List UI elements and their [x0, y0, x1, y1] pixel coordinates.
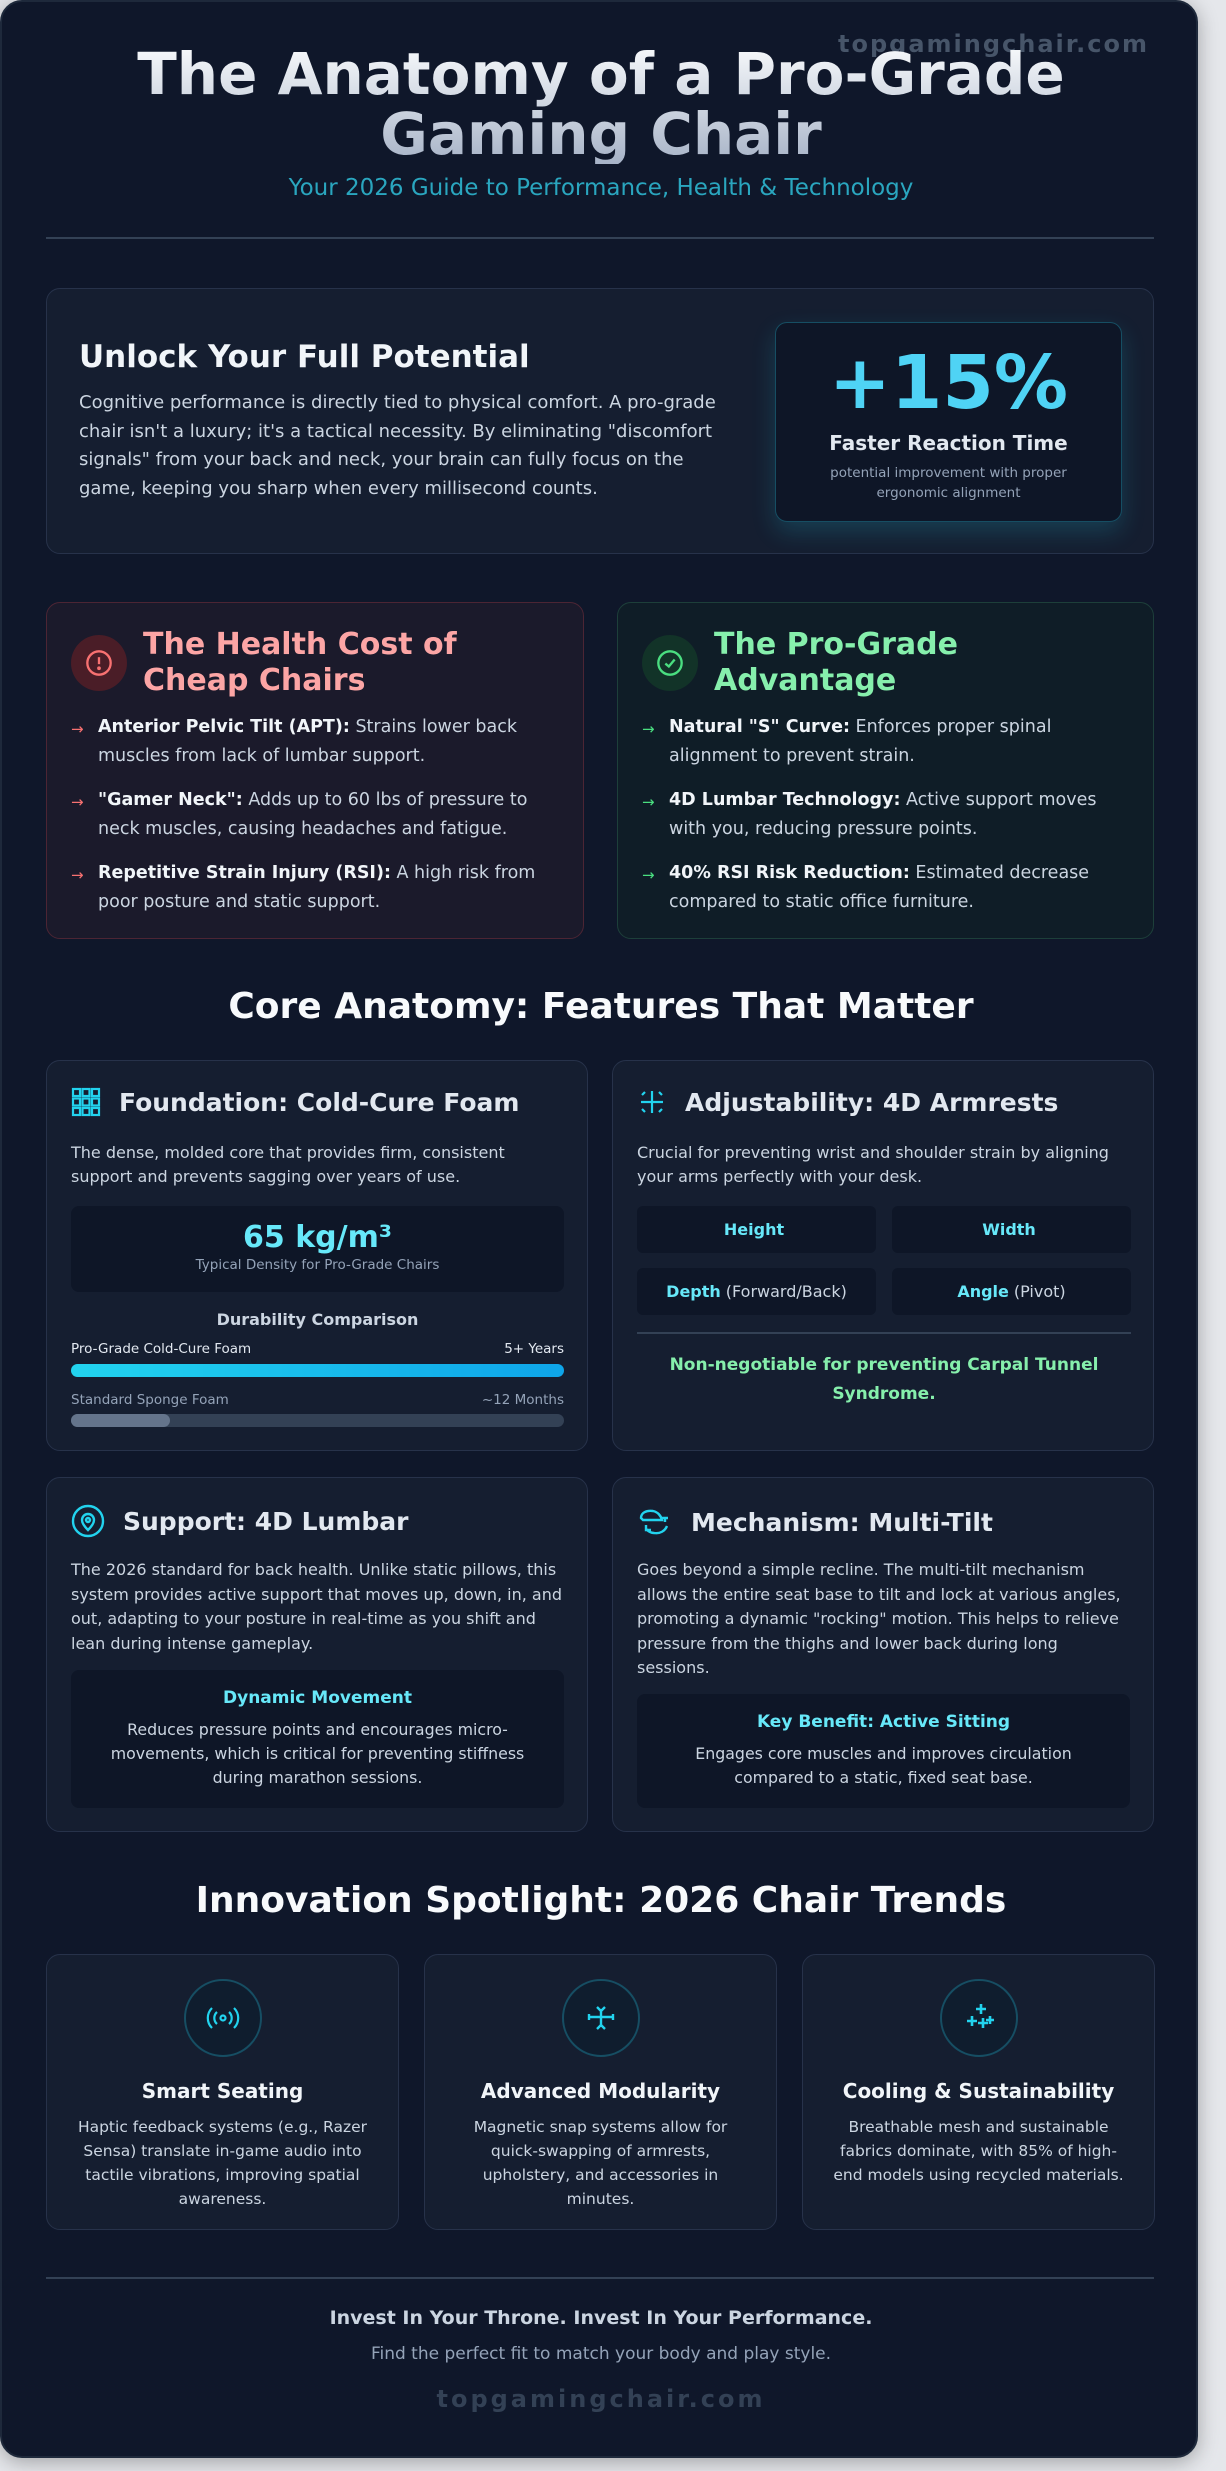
heading [143, 627, 457, 698]
trend card: modularity: Magnetic snap systems allow for quick-swapping of armrests, upholstery, and accessories in minutes. [474, 2118, 727, 2208]
adjustment grid: Width [982, 1220, 1036, 1239]
durability chart: 5+ Years [504, 1341, 564, 1357]
description: The 2026 standard for back health. Unlike static pillows, this system provides active support that moves up, down, in, and out, adapting to your posture in real-time as you shift and lean during intense gameplay. [71, 1560, 562, 1652]
trend card: smart seating: Haptic feedback systems (e.g., Razer Sensa) translate in-game audio into tactile vibrations, improving spatial awareness. [78, 2118, 367, 2208]
heading: Mechanism: Multi-Tilt [691, 1508, 993, 1536]
trend card: cooling: Cooling & Sustainability [843, 2079, 1114, 2103]
panel: foundation [46, 1060, 588, 1451]
trend card: smart seating: Smart Seating [142, 2079, 303, 2103]
panel: pro-grade advantage [617, 602, 1154, 939]
footer tagline: Invest In Your Throne. Invest In Your Performance. [330, 2307, 872, 2329]
heading: Advantage [714, 663, 896, 698]
description: Goes beyond a simple recline. The multi-tilt mechanism allows the entire seat base to tilt and lock at various angles, promoting a dynamic "rocking" motion. This helps to relieve pressure from the thighs and lower back during long sessions. [637, 1560, 1121, 1677]
list [71, 717, 535, 912]
description: Crucial for preventing wrist and shoulder strain by aligning your arms perfectly with your desk. [637, 1143, 1109, 1186]
durability chart: Pro-Grade Cold-Cure Foam [71, 1341, 251, 1357]
list: "Gamer Neck": Adds up to 60 lbs of pressure to neck muscles, causing headaches and fatigue. [98, 790, 527, 839]
stat number: +15% [829, 340, 1068, 426]
adjustment grid [637, 1206, 1131, 1315]
density box [71, 1206, 564, 1292]
intro heading: Unlock Your Full Potential [79, 339, 530, 375]
list: → [642, 793, 655, 811]
section heading: core anatomy: Core Anatomy: Features That Matter [228, 986, 974, 1027]
description: The dense, molded core that provides firm, consistent support and prevents sagging over years of use. [71, 1143, 505, 1186]
sub box: Engages core muscles and improves circulation compared to a static, fixed seat base. [695, 1744, 1072, 1787]
heading: Cheap Chairs [143, 663, 365, 698]
icon: warning [71, 635, 127, 691]
trend card: smart seating [46, 1954, 399, 2230]
density box: 65 kg/m³ [243, 1220, 392, 1255]
title: The Anatomy of a Pro-Grade [137, 40, 1065, 108]
trend card: modularity [424, 1954, 777, 2230]
heading [714, 627, 958, 698]
sub box [637, 1694, 1130, 1808]
durability chart: Standard Sponge Foam [71, 1392, 229, 1408]
heading: Foundation: Cold-Cure Foam [119, 1088, 519, 1116]
adjustment grid: Angle [957, 1282, 1009, 1301]
heading: The Health Cost of [143, 627, 457, 662]
sub box: Dynamic Movement [223, 1688, 412, 1708]
panel: multi-tilt [612, 1477, 1154, 1832]
list: Natural "S" Curve: Enforces proper spinal alignment to prevent strain. [669, 717, 1051, 766]
panel: intro [46, 288, 1154, 554]
list: Anterior Pelvic Tilt (APT): Strains lower back muscles from lack of lumbar support. [98, 717, 517, 766]
footer watermark: topgamingchair.com [436, 2385, 766, 2413]
trend card: cooling [802, 1954, 1155, 2230]
list: 4D Lumbar Technology: Active support moves with you, reducing pressure points. [669, 790, 1096, 839]
adjustment grid: Depth [666, 1282, 721, 1301]
watermark top: topgamingchair.com [838, 30, 1149, 58]
list: → [71, 866, 84, 884]
callout: Non-negotiable for preventing Carpal Tunnel Syndrome. [670, 1355, 1098, 1404]
heading: Support: 4D Lumbar [123, 1506, 408, 1536]
section heading: innovation: Innovation Spotlight: 2026 Chair Trends [196, 1880, 1006, 1921]
sub box [71, 1670, 564, 1808]
heading: Adjustability: 4D Armrests [685, 1088, 1058, 1116]
adjustment grid: (Pivot) [1014, 1282, 1066, 1301]
footer subtext: Find the perfect fit to match your body and play style. [371, 2344, 831, 2364]
list: → [642, 866, 655, 884]
title [2, 44, 1200, 164]
title: Gaming Chair [380, 100, 822, 168]
list: → [71, 720, 84, 738]
adjustment grid: Height [724, 1220, 784, 1239]
sub box: Reduces pressure points and encourages micro-movements, which is critical for preventing stiffness during marathon sessions. [111, 1720, 524, 1787]
stat label: Faster Reaction Time [829, 431, 1068, 455]
icon: vibration [184, 1979, 262, 2057]
list: → [642, 720, 655, 738]
panel: health cost [46, 602, 584, 939]
intro text: Cognitive performance is directly tied to physical comfort. A pro-grade chair isn't a luxury; it's a tactical necessity. By eliminating "discomfort signals" from your back and neck, your brain can fully focus on the game, keeping you sharp when every millisecond counts. [79, 392, 716, 498]
subtitle: Your 2026 Guide to Performance, Health & Technology [289, 175, 913, 201]
list: → [71, 793, 84, 811]
sub box: Key Benefit: Active Sitting [757, 1712, 1010, 1732]
list [642, 717, 1096, 912]
icon: modular [562, 1979, 640, 2057]
stat box [775, 322, 1122, 522]
density box: Typical Density for Pro-Grade Chairs [196, 1257, 439, 1273]
trend card: modularity: Advanced Modularity [481, 2079, 720, 2103]
heading: The Pro-Grade [714, 627, 958, 662]
durability chart: Durability Comparison [217, 1310, 418, 1329]
icon: check [642, 635, 698, 691]
list: 40% RSI Risk Reduction: Estimated decrease compared to static office furniture. [669, 863, 1089, 912]
panel: armrests [612, 1060, 1154, 1451]
trend card: cooling: Breathable mesh and sustainable fabrics dominate, with 85% of high-end models using recycled materials. [833, 2118, 1124, 2184]
list: Repetitive Strain Injury (RSI): A high risk from poor posture and static support. [98, 863, 535, 912]
durability chart [71, 1310, 564, 1427]
icon: sparkles [940, 1979, 1018, 2057]
adjustment grid: (Forward/Back) [726, 1282, 847, 1301]
stat note: potential improvement with proper ergonomic alignment [830, 465, 1067, 501]
panel: lumbar [46, 1477, 588, 1832]
durability chart: ~12 Months [482, 1392, 564, 1408]
